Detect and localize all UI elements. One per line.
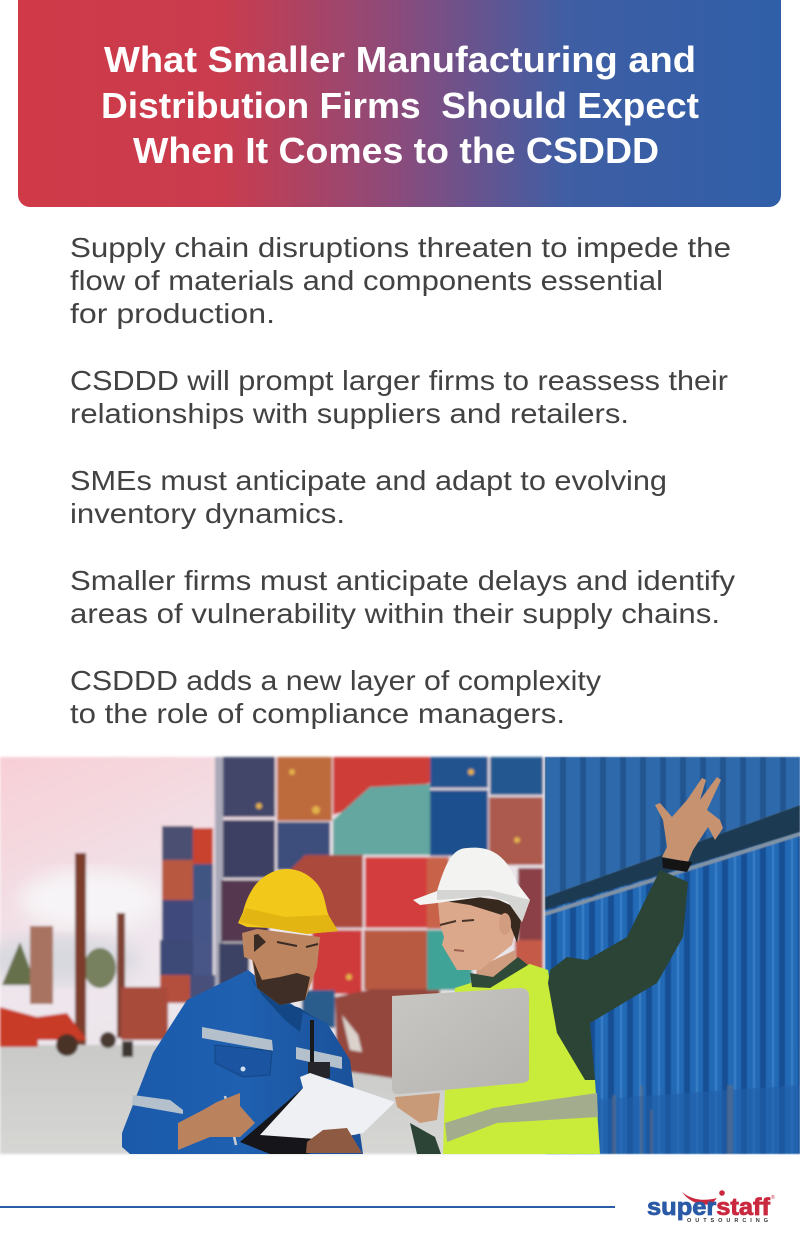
yellow hard hat bbox=[238, 869, 338, 934]
paragraph: compliance managers: to the role of compliance managers. bbox=[70, 698, 565, 729]
shirt pocket bbox=[215, 1045, 272, 1077]
paragraph: inventory dynamics: inventory dynamics. bbox=[70, 498, 345, 529]
clipboard bbox=[240, 1073, 395, 1154]
face and neck bbox=[438, 897, 528, 988]
title: What Smaller Manufacturing and bbox=[104, 39, 696, 80]
left hand and sleeve bbox=[410, 1123, 441, 1154]
footer bbox=[0, 1190, 775, 1224]
raised hand bbox=[655, 777, 723, 862]
reflective vest stripes bbox=[445, 1093, 598, 1142]
pen bbox=[225, 1096, 236, 1145]
paragraph: larger firms: CSDDD will prompt larger firms to reassess their bbox=[70, 365, 728, 396]
hands bbox=[178, 1093, 362, 1153]
face and beard bbox=[242, 929, 320, 1005]
body text bbox=[70, 232, 735, 729]
blue work shirt bbox=[122, 970, 363, 1154]
paragraph: larger firms bbox=[70, 365, 728, 429]
distant container stack bbox=[160, 826, 215, 1003]
high visibility vest bbox=[443, 964, 600, 1154]
logo swoosh bbox=[682, 1192, 717, 1205]
title bbox=[101, 39, 699, 171]
large container wall bbox=[215, 757, 543, 1085]
paragraph: delays and vulnerability: areas of vulnerability within their supply chains. bbox=[70, 598, 720, 629]
white hard hat bbox=[413, 848, 530, 922]
logo wordmark: superstaff bbox=[647, 1194, 771, 1221]
forklift machinery bbox=[0, 853, 168, 1057]
photo: two workers at a container yard bbox=[0, 757, 800, 1154]
reflective stripes bbox=[132, 1027, 342, 1114]
paragraph: supply chain disruptions: Supply chain disruptions threaten to impede the bbox=[70, 232, 731, 263]
wristband bbox=[662, 858, 692, 872]
paragraph: delays and vulnerability bbox=[70, 565, 735, 629]
logo: SuperStaff Outsourcing bbox=[647, 1190, 775, 1224]
laptop bbox=[392, 988, 529, 1094]
paragraph: larger firms: relationships with suppliers and retailers. bbox=[70, 398, 629, 429]
logo tagline: OUTSOURCING bbox=[687, 1218, 768, 1224]
paragraph: supply chain disruptions: for production. bbox=[70, 298, 275, 329]
raised arm sleeve bbox=[548, 870, 688, 1080]
paragraph: inventory dynamics: SMEs must anticipate and adapt to evolving bbox=[70, 465, 667, 496]
paragraph: inventory dynamics bbox=[70, 465, 667, 529]
paragraph: delays and vulnerability: Smaller firms must anticipate delays and identify bbox=[70, 565, 735, 596]
title: Distribution Firms Should Expect bbox=[101, 85, 699, 126]
blue container wall bbox=[545, 757, 800, 1154]
title: When It Comes to the CSDDD bbox=[133, 130, 659, 171]
worker in white hard hat bbox=[392, 777, 723, 1154]
walkie talkie bbox=[308, 1020, 330, 1078]
trees bbox=[2, 942, 116, 988]
paragraph: compliance managers bbox=[70, 665, 601, 729]
worker in yellow hard hat bbox=[122, 869, 395, 1154]
paragraph: supply chain disruptions: flow of materials and components essential bbox=[70, 265, 663, 296]
paragraph: compliance managers: CSDDD adds a new layer of complexity bbox=[70, 665, 601, 696]
paragraph: supply chain disruptions bbox=[70, 232, 731, 329]
logo registered mark: ® bbox=[771, 1194, 775, 1201]
banner background bbox=[18, 0, 781, 207]
yard background bbox=[0, 757, 800, 1154]
footer rule bbox=[0, 1206, 615, 1208]
header banner bbox=[18, 0, 781, 207]
